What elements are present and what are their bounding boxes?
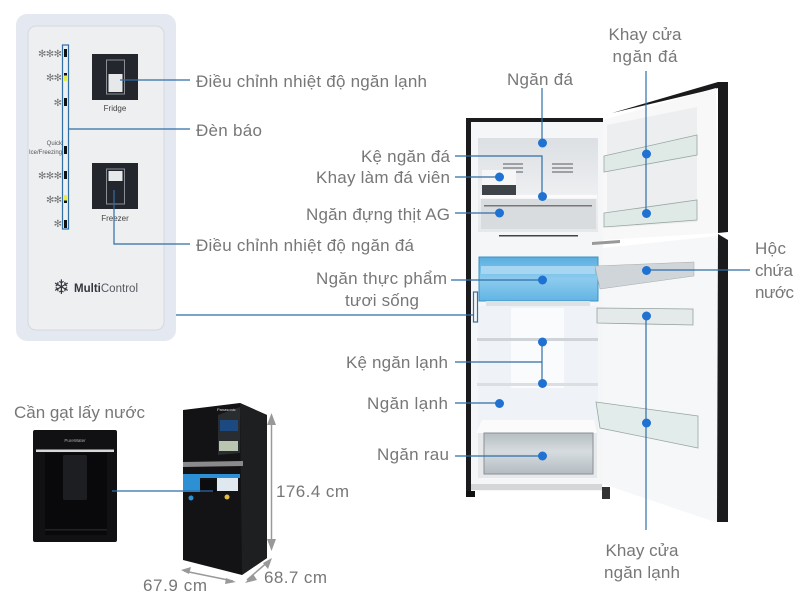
labels: Cần gạt lấy nước — [14, 403, 146, 422]
photo: closed refrigerator: Panasonic — [217, 407, 236, 412]
dimension: height: 176.4 cm — [276, 482, 349, 501]
photo: open refrigerator — [466, 82, 728, 522]
fresh food drawer — [479, 257, 598, 307]
labels: Ngăn đựng thịt AG — [306, 205, 450, 224]
photo: dispenser lever: PureWater — [64, 438, 86, 443]
labels: Ngăn đá — [507, 70, 574, 89]
callout dots — [495, 138, 651, 460]
labels: chứa — [755, 261, 794, 280]
labels: Ngăn thực phẩm — [316, 269, 447, 288]
panel: control panel — [16, 14, 176, 341]
indicator labels: ✻✻✻ — [38, 171, 62, 182]
labels: nước — [755, 283, 794, 302]
button: freezer — [92, 163, 138, 223]
photo: dispenser lever — [33, 430, 117, 542]
labels: Khay cửa — [606, 541, 679, 560]
dimension: height — [267, 413, 349, 551]
labels: Ngăn rau — [377, 445, 449, 464]
dimension: depth — [245, 558, 327, 587]
button: freezer: Freezer — [101, 214, 129, 223]
labels: Khay cửa — [608, 25, 682, 44]
labels: Khay làm đá viên — [316, 168, 450, 187]
logo: MultiControl: ❄ — [53, 277, 70, 299]
labels: Đèn báo — [196, 121, 262, 140]
indicator labels: Quick — [47, 141, 63, 147]
labels: Kệ ngăn lạnh — [346, 353, 448, 372]
vegetable drawer — [478, 433, 597, 478]
upper door — [603, 82, 728, 240]
indicator labels: Ice/Freezing — [29, 150, 62, 156]
labels: Ngăn lạnh — [367, 394, 448, 413]
labels: Điều chỉnh nhiệt độ ngăn đá — [196, 236, 415, 255]
labels: ngăn lạnh — [604, 563, 680, 582]
labels: Kệ ngăn đá — [361, 147, 451, 166]
logo: MultiControl — [53, 277, 138, 299]
dimension: width — [143, 567, 236, 595]
indicator labels: ✻✻ — [46, 73, 62, 84]
indicator labels — [29, 49, 63, 230]
labels: Điều chỉnh nhiệt độ ngăn lạnh — [196, 72, 427, 91]
labels: tươi sống — [345, 291, 419, 310]
labels: ngăn đá — [612, 47, 678, 66]
button: fridge: Fridge — [104, 104, 127, 113]
dimension: depth: 68.7 cm — [264, 568, 327, 587]
dimension: width: 67.9 cm — [143, 576, 207, 595]
photo: closed refrigerator — [183, 403, 267, 575]
indicator labels: ✻✻ — [46, 195, 62, 206]
fridge compartment — [476, 306, 598, 434]
indicator lights — [64, 49, 67, 228]
cabinet — [466, 118, 610, 499]
vents — [503, 163, 573, 173]
lower door — [592, 234, 728, 522]
logo: MultiControl: MultiControl — [74, 283, 138, 295]
callout lines — [62, 45, 750, 530]
freezer compartment — [478, 138, 598, 236]
button: fridge — [92, 54, 138, 113]
labels: Hộc — [755, 239, 786, 258]
indicator labels: ✻ — [54, 219, 62, 230]
indicator labels: ✻✻✻ — [38, 49, 62, 60]
indicator labels: ✻ — [54, 98, 62, 109]
